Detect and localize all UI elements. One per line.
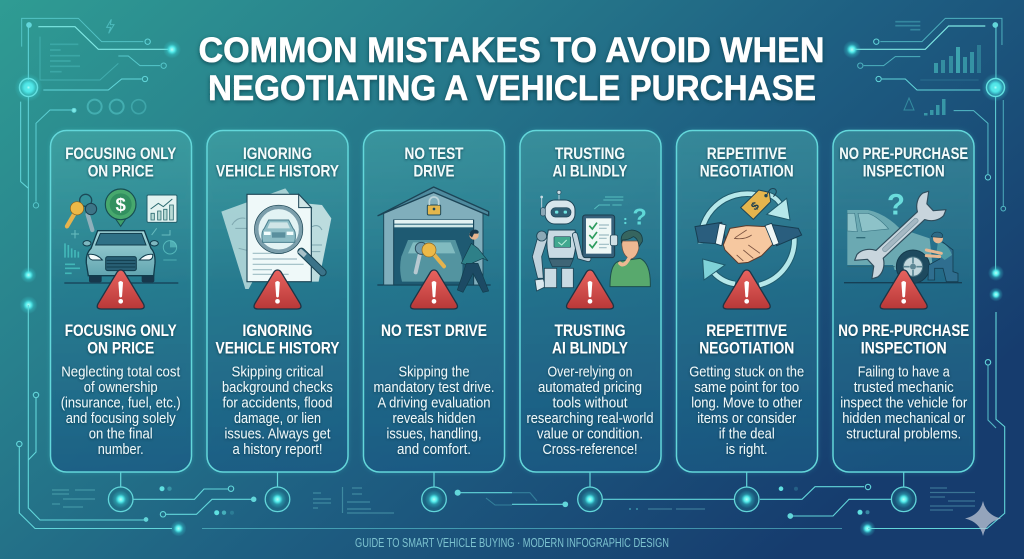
description 6: trusted mechanic: [854, 379, 954, 396]
description 5: items or consider: [697, 410, 796, 427]
description 3: reveals hidden: [392, 410, 476, 427]
description 4: automated pricing: [538, 379, 642, 396]
heading top 6: [839, 145, 968, 180]
description 1: and focusing solely: [66, 410, 176, 427]
heading top 1: ON PRICE: [88, 162, 154, 180]
description 6: Failing to have a: [858, 364, 950, 380]
big glowing hub: right: [982, 74, 1010, 102]
heading top 2: VEHICLE HISTORY: [216, 162, 339, 180]
heading lower 1: FOCUSING ONLY: [65, 321, 177, 340]
heading lower 4: AI BLINDLY: [552, 338, 629, 358]
icon: documents and magnifier: [221, 188, 331, 289]
connector node 6: [891, 472, 916, 512]
panel: focusing only on price: [50, 130, 192, 512]
description 3: A driving evaluation: [378, 394, 490, 412]
heading top 5: NEGOTIATION: [700, 162, 794, 180]
circuit decoration: top left: [21, 18, 168, 277]
heading lower 5: NEGOTIATION: [699, 338, 794, 358]
description 3: Skipping the: [398, 364, 470, 380]
icon: robot, tablet and thinking person: [532, 190, 650, 291]
heading lower 2: VEHICLE HISTORY: [216, 338, 340, 358]
heading lower 5: [699, 321, 794, 358]
big glowing hub: left: [14, 74, 42, 102]
description 2: damage, or lien: [234, 410, 321, 427]
description 1: on the final: [89, 426, 153, 442]
heading top 2: [216, 145, 339, 180]
heading lower 4: TRUSTING: [554, 321, 626, 340]
icon: car, wrench and mechanic: [844, 188, 962, 283]
heading top 4: [552, 145, 628, 180]
icon: warning triangle 1: [97, 270, 144, 309]
description 3: issues, handling,: [386, 426, 482, 442]
description 1: [61, 364, 181, 458]
icon: warning triangle 3: [411, 270, 457, 309]
panel: repetitive negotiation: [676, 130, 818, 512]
description 2: for accidents, flood: [222, 394, 332, 412]
description 4: Cross-reference!: [542, 441, 638, 458]
circuit decoration: top right: [855, 18, 1006, 273]
footer caption: GUIDE TO SMART VEHICLE BUYING · MODERN INFOGRAPHIC DESIGN: [355, 536, 669, 550]
heading top 3: DRIVE: [414, 162, 454, 180]
heading top 1: [65, 145, 176, 180]
description 5: same point for too: [694, 379, 799, 396]
description 2: Skipping critical: [232, 364, 324, 380]
heading top 1: FOCUSING ONLY: [65, 145, 176, 163]
heading top 4: AI BLINDLY: [552, 162, 628, 180]
description 4: value or condition.: [537, 426, 643, 442]
description 4: Over-relying on: [548, 364, 632, 380]
heading top 3: NO TEST: [404, 145, 464, 163]
description 6: [840, 364, 967, 442]
description 5: if the deal: [719, 426, 775, 442]
panel: no test drive: [364, 130, 504, 512]
description 1: (insurance, fuel, etc.): [61, 394, 181, 412]
heading top 4: TRUSTING: [555, 145, 625, 163]
heading lower 6: INSPECTION: [861, 338, 947, 358]
bar chart decoration: [904, 45, 981, 116]
title: [198, 31, 824, 108]
heading lower 1: [65, 321, 177, 358]
heading lower 3: NO TEST DRIVE: [381, 321, 487, 340]
panel: trusting ai blindly: [520, 130, 661, 512]
heading lower 2: [216, 321, 340, 358]
heading top 3: [404, 145, 464, 180]
panel: ignoring vehicle history: [207, 130, 348, 512]
icon: sparkle watermark: [965, 501, 1001, 536]
heading lower 6: [838, 321, 969, 358]
description 5: is right.: [726, 441, 768, 458]
heading top 6: INSPECTION: [863, 162, 945, 180]
icon: keys, dollar, chart and car: $: [115, 194, 126, 215]
heading top 6: NO PRE-PURCHASE: [839, 145, 968, 163]
description 2: issues. Always get: [224, 426, 331, 442]
icon: car, wrench and mechanic: ?: [887, 188, 905, 221]
heading top 5: [700, 145, 794, 180]
title: COMMON MISTAKES TO AVOID WHEN: [198, 31, 824, 70]
description 5: Getting stuck on the: [689, 364, 804, 380]
description 2: background checks: [222, 379, 333, 396]
description 2: a history report!: [232, 441, 322, 458]
description 6: hidden mechanical or: [842, 410, 965, 427]
connector node 1: [108, 472, 133, 512]
connector node 3: [422, 472, 446, 512]
icon: handshake, price tag and cycle arrows: $: [749, 200, 762, 213]
description 1: Neglecting total cost: [61, 364, 181, 380]
small dots and faint data lines: [52, 486, 975, 515]
heading lower 1: ON PRICE: [87, 338, 154, 358]
description 5: long. Move to other: [691, 394, 802, 412]
description 2: [222, 364, 333, 458]
title: NEGOTIATING A VEHICLE PURCHASE: [208, 69, 816, 108]
panel: no pre-purchase inspection: [833, 130, 974, 512]
heading lower 6: NO PRE-PURCHASE: [838, 321, 969, 340]
description 3: and comfort.: [397, 441, 471, 458]
heading lower 4: [552, 321, 629, 358]
description 1: number.: [98, 441, 144, 458]
connector node 4: [578, 472, 602, 512]
description 5: [689, 364, 804, 458]
icon: keys, dollar, chart and car: [64, 189, 178, 283]
description 4: [526, 364, 654, 458]
connector node 2: [265, 472, 290, 512]
description 3: [374, 364, 494, 458]
heading top 2: IGNORING: [243, 145, 312, 163]
heading lower 5: REPETITIVE: [706, 321, 787, 340]
icon: handshake, price tag and cycle arrows: [695, 188, 802, 285]
icon: warning triangle 4: [567, 270, 613, 309]
icon: garage, keys and walking person: [377, 187, 491, 292]
circuit decoration: bottom: [17, 305, 1005, 528]
icon: warning triangle 2: [254, 270, 301, 309]
description 1: of ownership: [84, 379, 158, 396]
icon: robot, tablet and thinking person: ?: [633, 203, 647, 229]
icon: warning triangle 6: [880, 270, 927, 309]
description 4: tools without: [552, 394, 628, 412]
description 4: researching real-world: [526, 410, 654, 427]
description 6: structural problems.: [846, 426, 961, 442]
description 3: mandatory test drive.: [374, 379, 494, 396]
heading lower 2: IGNORING: [242, 321, 312, 340]
icon: warning triangle 5: [723, 270, 770, 309]
description 6: inspect the vehicle for: [840, 394, 967, 412]
connector node 5: [734, 472, 759, 512]
heading top 5: REPETITIVE: [707, 145, 787, 163]
